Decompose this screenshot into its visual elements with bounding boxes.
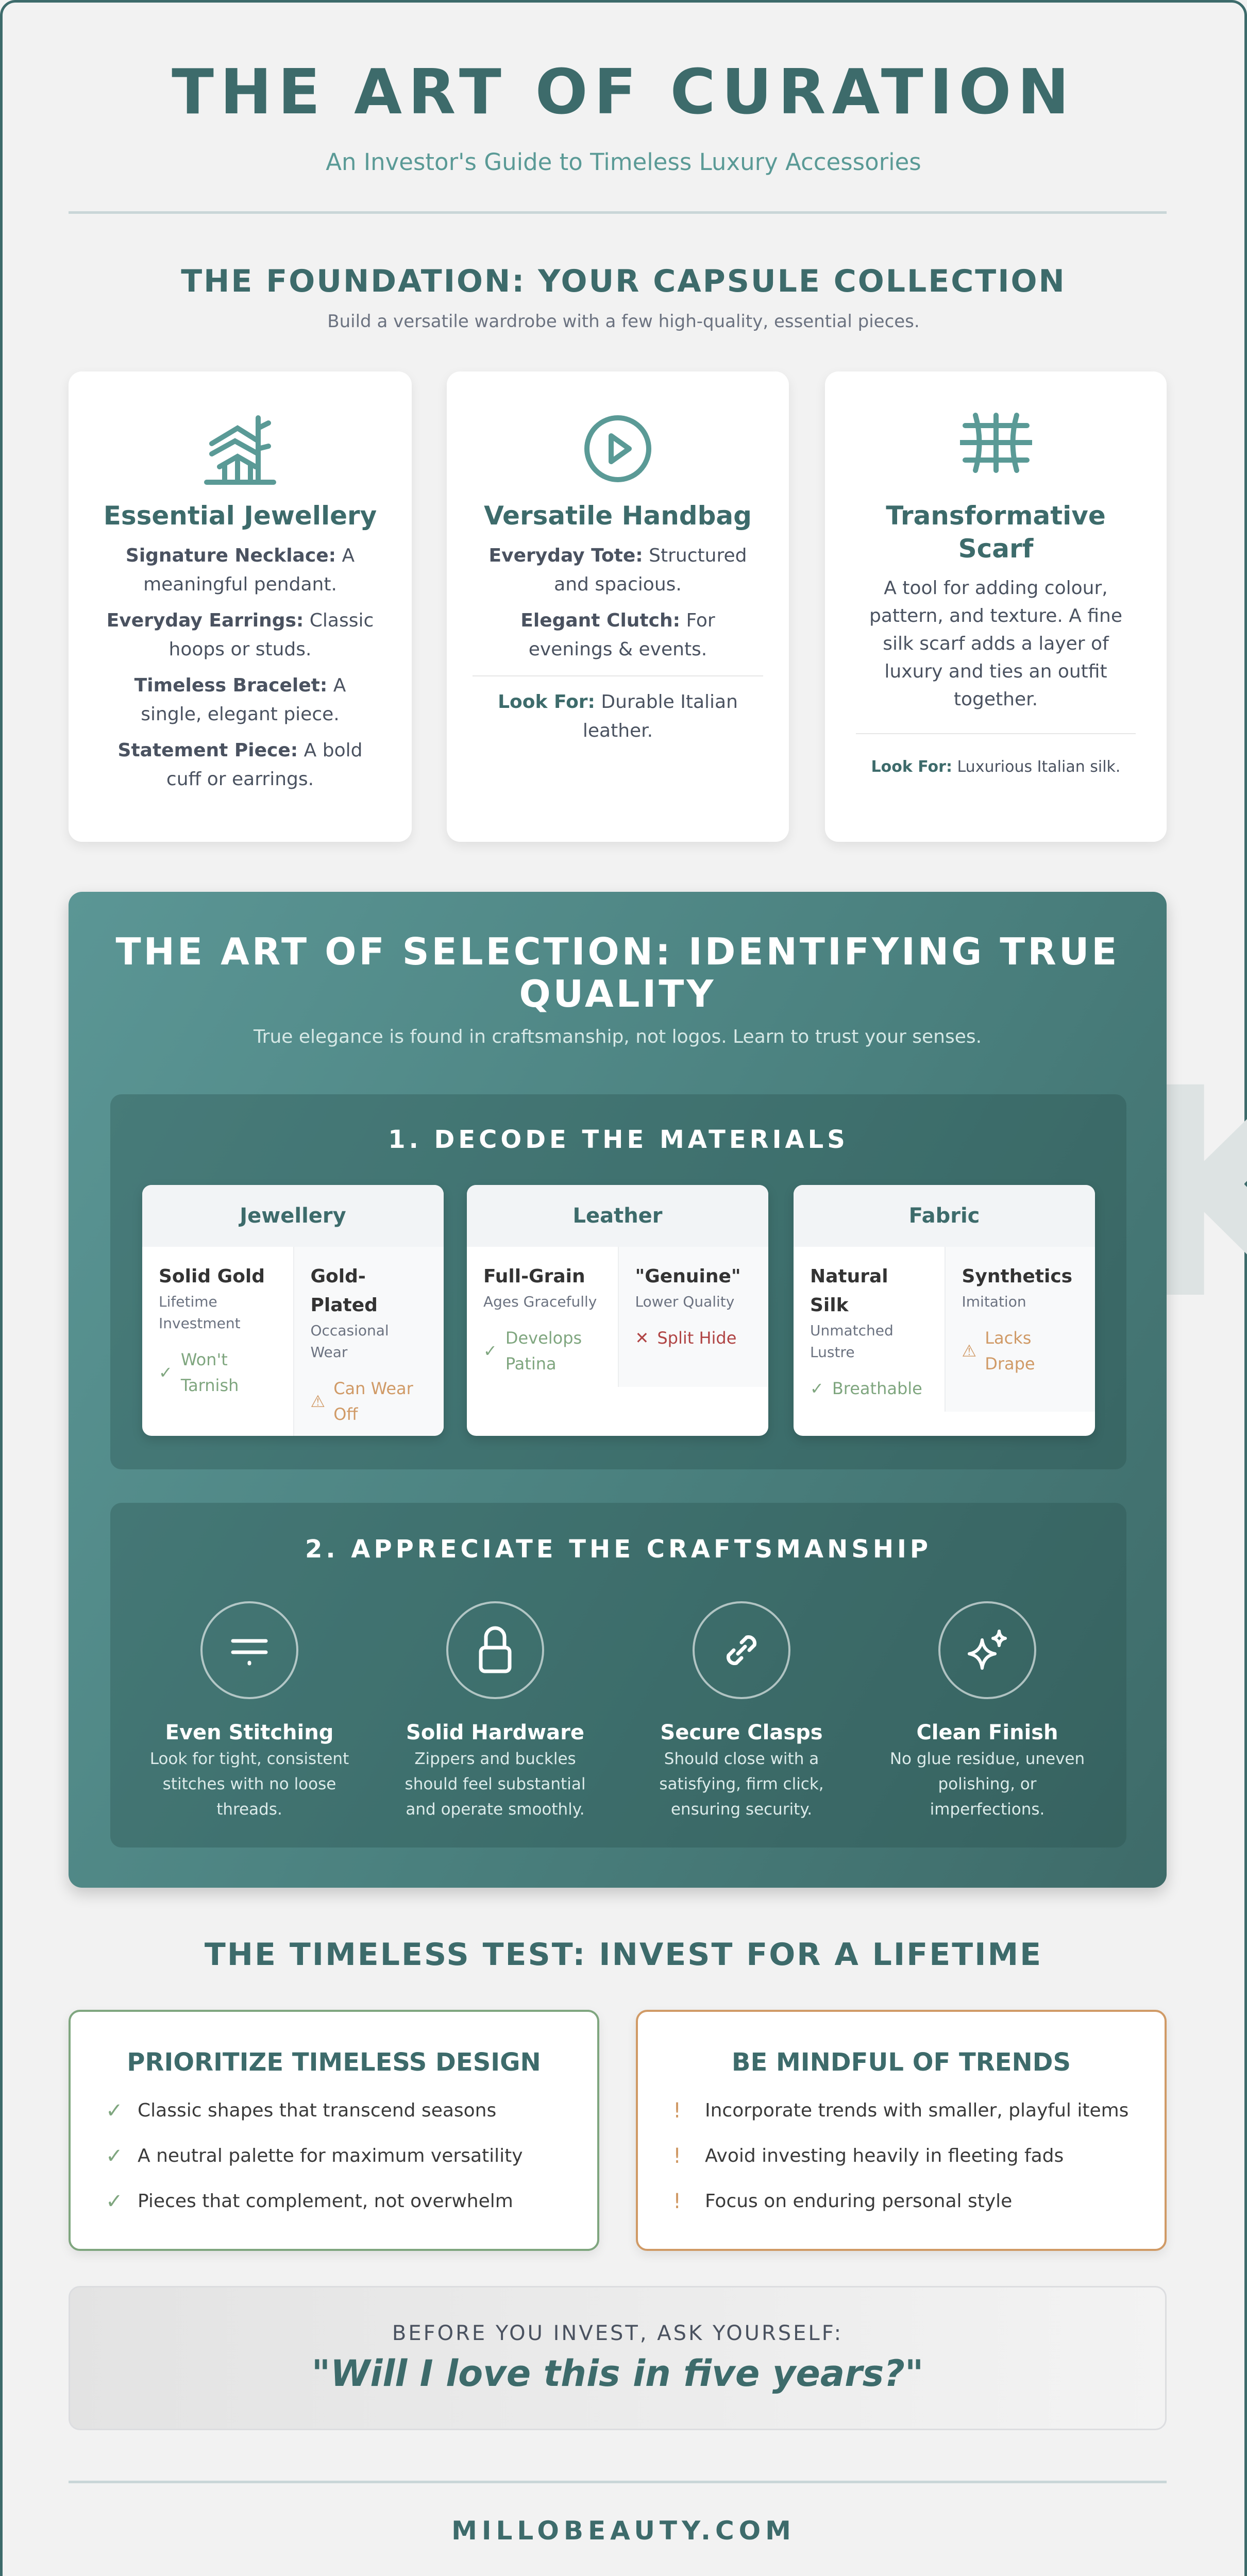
item: solid hardware <box>405 1601 585 1819</box>
panel: essential jewellery: Timeless Bracelet: A single, elegant piece. <box>134 675 346 725</box>
panel: prioritize timeless design: A neutral palette for maximum versatility <box>138 2145 523 2166</box>
selection heading: THE ART OF SELECTION: IDENTIFYING TRUE QUALITY <box>115 930 1119 1015</box>
item: clean finish: No glue residue, uneven polishing, or imperfections. <box>890 1750 1085 1819</box>
material card: leather: Split Hide <box>657 1328 736 1348</box>
icon: play circle <box>584 415 651 482</box>
panel: prioritize timeless design: ✓ <box>106 2190 123 2213</box>
panel: essential jewellery: Statement Piece: A bold cuff or earrings. <box>118 740 362 790</box>
panel: transformative scarf <box>825 371 1167 842</box>
panel: be mindful of trends: ! <box>673 2144 681 2168</box>
subtitle: An Investor's Guide to Timeless Luxury Accessories <box>326 148 921 176</box>
item: even stitching: Look for tight, consistent stitches with no loose threads. <box>150 1750 349 1819</box>
material card: jewellery: ⚠ <box>310 1392 325 1411</box>
icon: jewellery <box>204 415 276 485</box>
material card: jewellery: Can Wear Off <box>333 1379 413 1424</box>
panel: be mindful of trends <box>636 2010 1167 2251</box>
item: solid hardware: Solid Hardware <box>406 1721 584 1744</box>
materials heading: 1. DECODE THE MATERIALS <box>388 1125 849 1154</box>
material card: fabric: Natural Silk <box>810 1266 888 1316</box>
panel: decode the materials <box>110 1094 1126 1469</box>
panel: transformative scarf: A tool for adding colour, pattern, and texture. A fine silk scarf adds a layer of luxury and ties an outfit together. <box>869 578 1122 710</box>
panel: essential jewellery: Everyday Earrings: Classic hoops or studs. <box>107 610 374 660</box>
item: secure clasps: Secure Clasps <box>660 1721 823 1744</box>
panel: prioritize timeless design: Classic shapes that transcend seasons <box>138 2100 496 2121</box>
material card: fabric: Lacks Drape <box>985 1328 1035 1374</box>
material card: leather: ✕ <box>635 1328 649 1348</box>
panel: be mindful of trends: BE MINDFUL OF TRENDS <box>732 2048 1071 2077</box>
material card: fabric: ⚠ <box>962 1341 976 1361</box>
material card: leather: Ages Gracefully <box>483 1293 597 1310</box>
panel: prioritize timeless design: Pieces that complement, not overwhelm <box>138 2191 513 2212</box>
item: even stitching: Even Stitching <box>165 1721 333 1744</box>
panel: prioritize timeless design: ✓ <box>106 2099 123 2123</box>
material card: jewellery: Won't Tarnish <box>181 1350 239 1395</box>
panel: versatile handbag: Versatile Handbag <box>484 501 752 531</box>
icon: grid <box>960 413 1032 473</box>
item: clean finish <box>890 1601 1085 1819</box>
panel: versatile handbag: Look For: Durable Italian leather. <box>498 691 738 741</box>
panel: versatile handbag <box>447 371 789 842</box>
material card: jewellery: Occasional Wear <box>310 1322 389 1361</box>
material card: fabric: Synthetics <box>962 1266 1072 1287</box>
material card: jewellery: Lifetime Investment <box>159 1293 241 1332</box>
item: solid hardware: Zippers and buckles should feel substantial and operate smoothly. <box>405 1750 585 1819</box>
material card: jewellery: ✓ <box>159 1363 173 1382</box>
item: even stitching <box>150 1601 349 1819</box>
panel: prioritize timeless design: ✓ <box>106 2144 123 2168</box>
footer: MILLOBEAUTY.COM <box>451 2516 796 2546</box>
heading: timeless test: THE TIMELESS TEST: INVEST FOR A LIFETIME <box>205 1937 1042 1973</box>
title: THE ART OF CURATION <box>172 57 1075 128</box>
material card: fabric: Fabric <box>909 1204 980 1228</box>
material card: fabric <box>794 1185 1095 1436</box>
material card: fabric: ✓ <box>810 1379 824 1398</box>
heading: foundation: THE FOUNDATION: YOUR CAPSULE COLLECTION <box>181 263 1066 299</box>
material card: leather: Leather <box>572 1204 663 1228</box>
panel: essential jewellery: Essential Jewellery <box>104 501 377 531</box>
foundation subtitle: Build a versatile wardrobe with a few high-quality, essential pieces. <box>327 311 920 332</box>
panel: prioritize timeless design: PRIORITIZE TIMELESS DESIGN <box>127 2048 541 2077</box>
material card: leather: Full-Grain <box>483 1266 585 1287</box>
material card: fabric: Breathable <box>832 1379 922 1398</box>
item: secure clasps: Should close with a satisfying, firm click, ensuring security. <box>659 1750 824 1819</box>
material card: leather: Lower Quality <box>635 1293 734 1310</box>
material card: leather: Develops Patina <box>505 1328 582 1374</box>
material card: jewellery: Jewellery <box>240 1204 346 1228</box>
material card: leather <box>467 1185 768 1436</box>
panel: essential jewellery: Signature Necklace: A meaningful pendant. <box>126 545 355 595</box>
panel: be mindful of trends: ! <box>673 2190 681 2213</box>
panel: versatile handbag: Elegant Clutch: For evenings & events. <box>520 610 715 660</box>
panel: transformative scarf: Look For: Luxurious Italian silk. <box>871 758 1120 776</box>
material card: jewellery: Gold-Plated <box>310 1266 378 1316</box>
panel: transformative scarf: Transformative Scarf <box>886 501 1106 564</box>
craftsmanship heading: 2. APPRECIATE THE CRAFTSMANSHIP <box>305 1535 932 1564</box>
panel: be mindful of trends: ! <box>673 2099 681 2123</box>
callout: ask yourself: BEFORE YOU INVEST, ASK YOURSELF: <box>392 2321 843 2345</box>
panel: craftsmanship <box>110 1503 1126 1848</box>
callout: ask yourself <box>69 2286 1167 2430</box>
material card: fabric: Unmatched Lustre <box>810 1322 894 1361</box>
item: clean finish: Clean Finish <box>916 1721 1058 1744</box>
panel: be mindful of trends: Focus on enduring personal style <box>705 2191 1012 2212</box>
panel: versatile handbag: Everyday Tote: Structured and spacious. <box>489 545 747 595</box>
panel: be mindful of trends: Avoid investing heavily in fleeting fads <box>705 2145 1064 2166</box>
material card: leather: "Genuine" <box>635 1266 741 1287</box>
selection subtitle: True elegance is found in craftsmanship, not logos. Learn to trust your senses. <box>254 1026 982 1047</box>
material card: fabric: Imitation <box>962 1293 1026 1310</box>
panel: be mindful of trends: Incorporate trends with smaller, playful items <box>705 2100 1128 2121</box>
callout: ask yourself: "Will I love this in five years?" <box>312 2352 923 2395</box>
material card: jewellery <box>142 1185 444 1436</box>
panel: prioritize timeless design <box>69 2010 599 2251</box>
material card: leather: ✓ <box>483 1341 497 1361</box>
item: secure clasps <box>659 1601 824 1819</box>
panel: essential jewellery <box>69 371 412 842</box>
material card: jewellery: Solid Gold <box>159 1266 265 1287</box>
panel: art of selection <box>69 892 1167 1888</box>
